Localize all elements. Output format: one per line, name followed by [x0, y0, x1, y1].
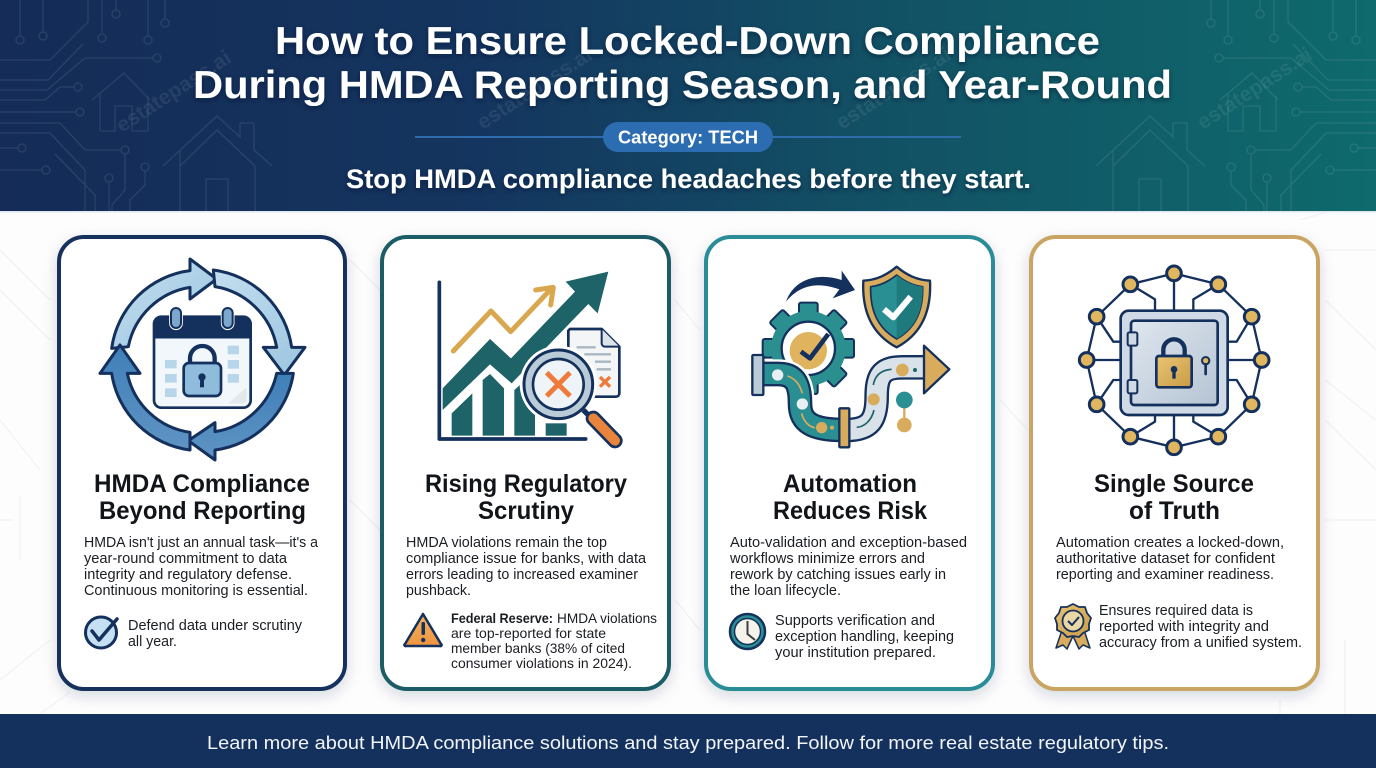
watermarks: estatepass.ai	[112, 46, 235, 137]
callout text: reported with integrity and	[1099, 619, 1269, 635]
heading: Beyond Reporting	[99, 497, 306, 525]
callout text: HMDA violations	[557, 611, 657, 626]
watermarks: estatepass.ai	[1193, 43, 1316, 134]
callout text	[128, 618, 303, 650]
heading: Scrutiny	[478, 497, 574, 525]
body text: pushback.	[406, 582, 471, 599]
body text: Continuous monitoring is essential.	[84, 582, 308, 599]
background pattern	[0, 211, 1376, 714]
body text: Auto-validation and exception-based	[730, 534, 967, 551]
heading: Automation	[783, 470, 917, 498]
category pill: Category: TECH	[618, 128, 758, 148]
card frame	[59, 237, 345, 689]
icon: gear, shield and pipeline	[752, 267, 949, 447]
header banner	[0, 0, 1376, 212]
body text: HMDA violations remain the top	[406, 534, 607, 551]
callout text: all year.	[128, 634, 177, 650]
body text: errors leading to increased examiner	[406, 566, 638, 583]
watermarks: estatepass.ai	[473, 43, 596, 134]
title	[193, 20, 1172, 107]
body text	[84, 534, 319, 599]
callout text: accuracy from a unified system.	[1099, 635, 1302, 651]
icon: rising chart with magnifier	[439, 272, 619, 441]
heading	[94, 470, 310, 525]
subtitle: Stop HMDA compliance headaches before they start.	[346, 164, 1031, 194]
heading	[1094, 470, 1254, 525]
body text: year-round commitment to data	[84, 550, 288, 567]
card frame	[1031, 237, 1318, 689]
icon: check circle	[86, 615, 119, 648]
footer bar: Learn more about HMDA compliance solutions and stay prepared. Follow for more real estate regulatory tips.	[207, 732, 1169, 753]
body text: the loan lifecycle.	[730, 582, 841, 599]
watermarks: estatepass.ai	[832, 43, 955, 134]
body text: compliance issue for banks, with data	[406, 550, 647, 567]
watermarks	[112, 43, 1316, 137]
icon: clock	[730, 614, 765, 649]
panel: rising regulatory scrutiny	[382, 237, 669, 689]
panel: single source of truth	[1031, 237, 1318, 689]
heading: HMDA Compliance	[94, 470, 310, 498]
body text	[729, 534, 967, 599]
heading: Reduces Risk	[773, 497, 927, 525]
title: How to Ensure Locked-Down Compliance	[275, 20, 1100, 63]
heading: Rising Regulatory	[425, 470, 627, 498]
callout text: consumer violations in 2024).	[451, 656, 632, 671]
title: During HMDA Reporting Season, and Year-Round	[193, 64, 1172, 107]
card frame	[382, 237, 669, 689]
callout text: member banks (38% of cited	[451, 641, 625, 656]
heading	[425, 470, 627, 525]
icon: calendar lock with cycle arrows	[100, 259, 305, 460]
body text: authoritative dataset for confident	[1056, 550, 1276, 567]
callout text: Supports verification and	[775, 613, 935, 629]
body text	[1056, 534, 1284, 583]
callout text: Defend data under scrutiny	[128, 618, 303, 634]
body text: HMDA isn't just an annual task—it's a	[84, 534, 319, 551]
callout text	[775, 613, 954, 661]
body text: Automation creates a locked-down,	[1056, 534, 1284, 551]
footer bar	[0, 714, 1376, 768]
panel: HMDA compliance beyond reporting	[59, 237, 345, 689]
panel: automation reduces risk	[706, 237, 993, 689]
category line	[415, 136, 961, 138]
card frame	[706, 237, 993, 689]
category pill	[603, 122, 773, 152]
circuit and house pattern	[0, 0, 1376, 211]
body text: rework by catching issues early in	[730, 566, 946, 583]
body text	[406, 534, 647, 599]
callout text: are top-reported for state	[451, 626, 606, 641]
callout text	[451, 611, 657, 671]
heading: of Truth	[1129, 497, 1220, 525]
heading: Single Source	[1094, 470, 1254, 498]
callout text: Ensures required data is	[1099, 603, 1253, 619]
callout text	[1099, 603, 1302, 651]
body text: integrity and regulatory defense.	[84, 566, 292, 583]
body text: reporting and examiner readiness.	[1056, 566, 1274, 583]
heading	[773, 470, 927, 525]
body text: workflows minimize errors and	[729, 550, 925, 567]
callout text: exception handling, keeping	[775, 629, 954, 645]
icon: award badge	[1055, 604, 1091, 649]
icon: warning triangle	[404, 614, 442, 646]
callout text: your institution prepared.	[775, 645, 936, 661]
icon: vault with data network	[1079, 266, 1269, 455]
callout text: Federal Reserve:	[451, 611, 553, 626]
